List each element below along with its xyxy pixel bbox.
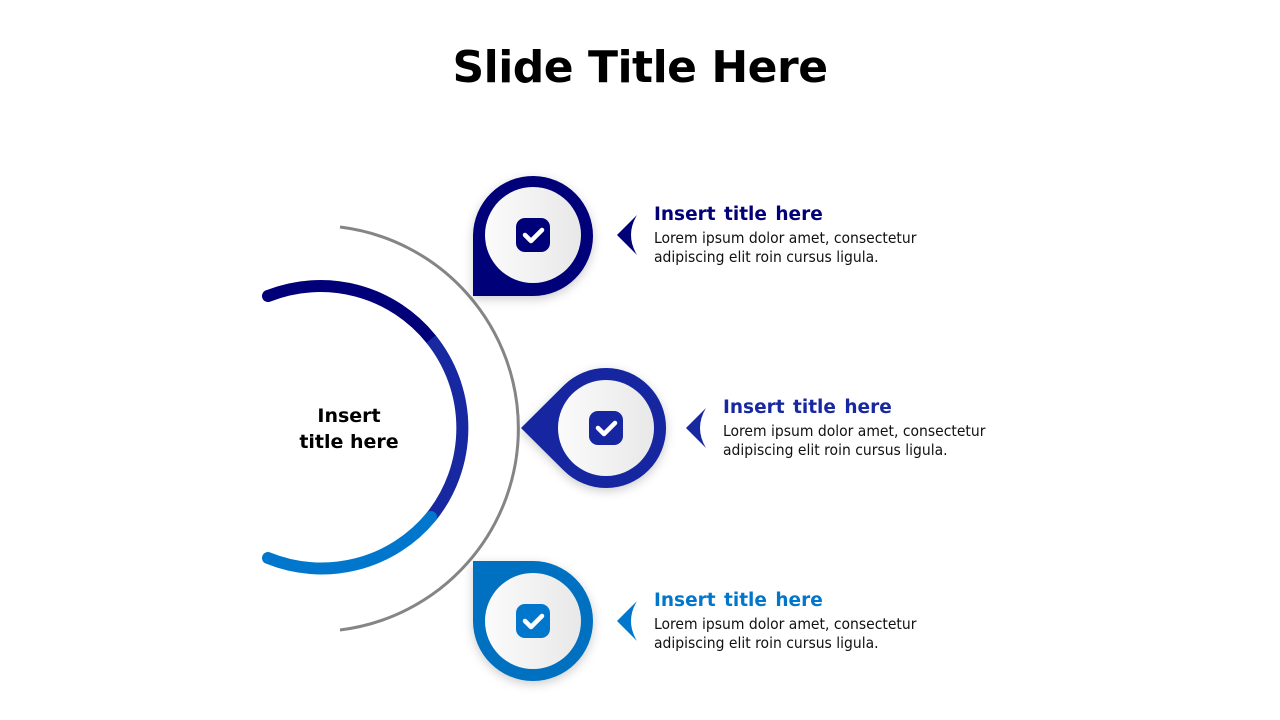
text block 2: Lorem ipsum dolor amet, consectetur	[723, 422, 985, 440]
text block 3	[654, 590, 916, 652]
pin 1	[473, 176, 593, 296]
text block 3: adipiscing elit roin cursus ligula.	[654, 634, 879, 652]
gray outer arc	[340, 227, 518, 630]
text block 3: Insert title here	[654, 590, 823, 611]
pin 2	[521, 368, 666, 488]
text block 2: Insert title here	[723, 397, 892, 418]
title: Slide Title Here	[452, 42, 828, 93]
center label	[299, 405, 399, 453]
segmented inner arc	[268, 286, 462, 568]
text block 1: adipiscing elit roin cursus ligula.	[654, 248, 879, 266]
text block 2	[723, 397, 986, 459]
arrow 2	[686, 408, 706, 448]
text block 1	[654, 204, 916, 266]
pin 3	[473, 561, 593, 681]
arrow 3	[617, 601, 637, 641]
center label: Insert	[317, 405, 381, 427]
text block 1: Insert title here	[654, 204, 823, 225]
center label: title here	[299, 431, 399, 453]
arrow 1	[617, 215, 637, 255]
text block 3: Lorem ipsum dolor amet, consectetur	[654, 615, 916, 633]
text block 1: Lorem ipsum dolor amet, consectetur	[654, 229, 916, 247]
text block 2: adipiscing elit roin cursus ligula.	[723, 441, 948, 459]
